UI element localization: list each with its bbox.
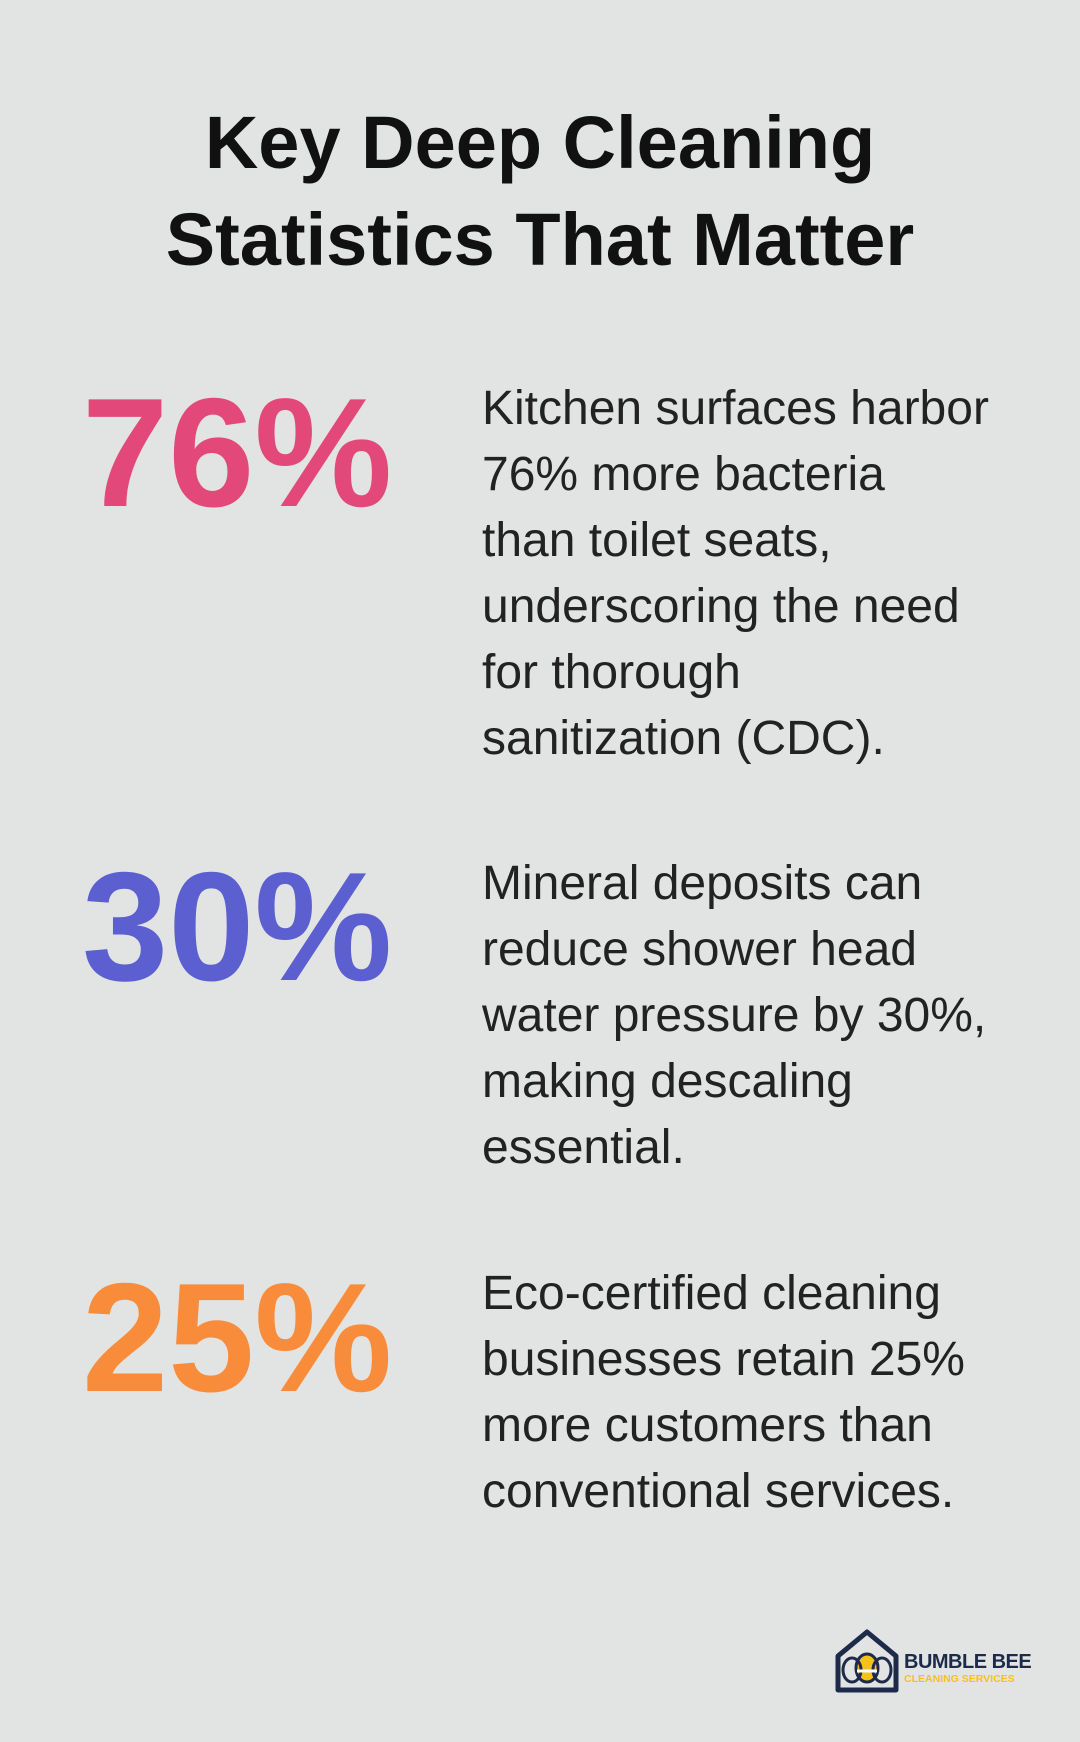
stat text: eco: [482, 1267, 965, 1518]
stat text: kitchen: underscoring the need: [482, 580, 960, 633]
logo text: CLEANING SERVICES: [904, 1673, 1015, 1685]
stat text: mineral: water pressure by 30%,: [482, 989, 986, 1042]
stat number: 76%: 76%: [82, 366, 392, 539]
stat text: kitchen: Kitchen surfaces harbor: [482, 382, 989, 435]
stat text: eco: conventional services.: [482, 1465, 954, 1518]
stat text: mineral: Mineral deposits can: [482, 857, 922, 910]
stat text: mineral: essential.: [482, 1121, 685, 1174]
title: Key Deep Cleaning: [205, 101, 875, 184]
logo text: BUMBLE BEE: [904, 1651, 1031, 1673]
stat text: eco: Eco-certified cleaning: [482, 1267, 941, 1320]
icon: bee house: [836, 1629, 898, 1692]
logo: [836, 1629, 1031, 1692]
stat text: mineral: reduce shower head: [482, 923, 917, 976]
logo text: [904, 1651, 1031, 1685]
stat text: kitchen: sanitization (CDC).: [482, 712, 885, 765]
stat text: mineral: [482, 857, 986, 1174]
stat text: eco: more customers than: [482, 1399, 933, 1452]
title: [166, 101, 914, 281]
stat text: kitchen: 76% more bacteria: [482, 448, 885, 501]
stat number: 30%: 30%: [82, 840, 392, 1013]
title: Statistics That Matter: [166, 198, 914, 281]
stat text: eco: businesses retain 25%: [482, 1333, 965, 1386]
stat text: mineral: making descaling: [482, 1055, 853, 1108]
stat text: kitchen: than toilet seats,: [482, 514, 832, 567]
stat number: 25%: 25%: [82, 1251, 392, 1424]
stat text: kitchen: for thorough: [482, 646, 741, 699]
stat text: kitchen: [482, 382, 989, 765]
